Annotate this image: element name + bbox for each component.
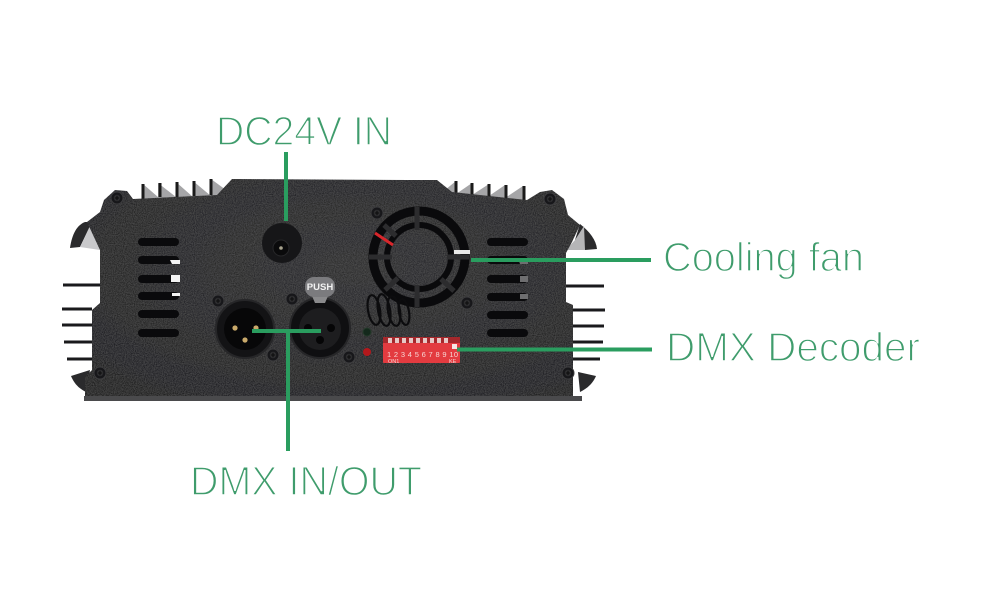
DIP switch: 1 2 3 4 5 6 7 8 9 10 [387,350,458,359]
PUSH latch: PUSH [307,282,333,293]
DIP switch [383,337,460,365]
label: DMX Decoder: DMX Decoder [666,324,920,370]
PUSH latch [305,277,335,303]
heatsink fins: left side [62,285,100,359]
callout line: DMX IN/OUT [252,331,321,451]
heatsink fins: top left [143,179,226,200]
DIP switch: ON1 [388,359,399,365]
XLR female connector [290,298,350,358]
label: DMX IN/OUT: DMX IN/OUT [190,458,422,504]
callout line: DMX Decoder [457,348,652,352]
label: Cooling fan: Cooling fan [663,234,864,280]
DC power jack [262,223,302,263]
heatsink fins: right side [566,286,605,359]
screws [94,192,574,379]
wire coil [365,293,411,327]
side brackets [70,222,597,392]
indicator LEDs [363,328,371,356]
device body [85,179,580,398]
label: DC24V IN: DC24V IN [216,108,392,154]
callout line: Cooling fan [471,258,651,262]
vent slots: right [487,238,528,337]
cooling fan [369,207,470,307]
body bottom edge [84,396,582,401]
vent slots: left [138,238,180,337]
heatsink fins: top right [445,181,524,200]
XLR male connector [216,300,274,358]
DIP switch: KE [449,359,457,365]
callout line: DC24V IN [284,152,288,221]
